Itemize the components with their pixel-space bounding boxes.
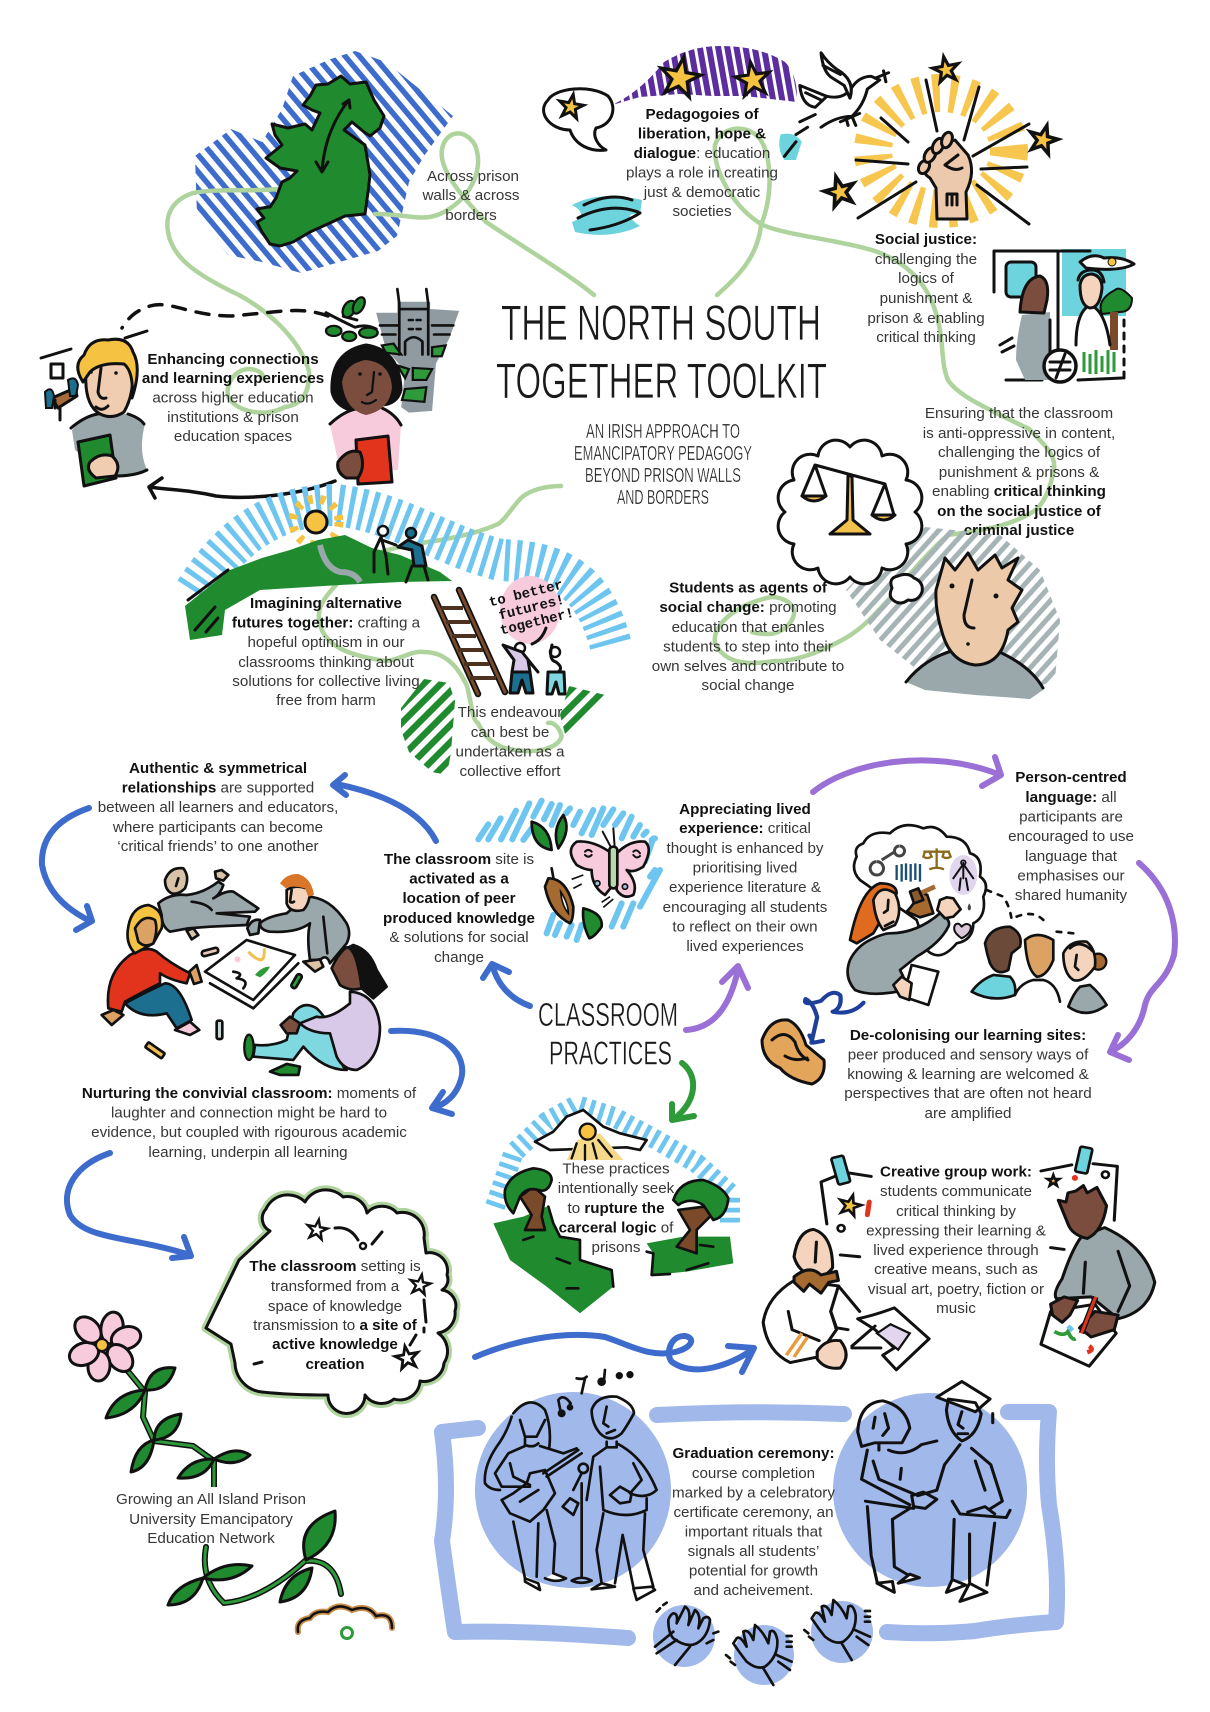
text	[558, 1160, 675, 1256]
speech bubble: to better futures together	[488, 576, 576, 644]
text: change	[434, 949, 484, 966]
text: Pedagogoies of	[645, 106, 759, 123]
icon: man with green book	[71, 339, 147, 486]
illustration: woman, thought cloud and listeners	[848, 825, 1107, 1013]
speech bubble: to better futures together: to better	[488, 578, 565, 611]
text: produced knowledge	[383, 910, 535, 927]
panel: creative group work	[763, 1146, 1155, 1370]
speech bubble: to better futures together: futures!	[497, 593, 566, 624]
label: walls & across	[421, 187, 520, 204]
panel: classroom practices heading: CLASSROOM	[538, 996, 678, 1033]
text: collective effort: This endeavour	[458, 704, 562, 721]
panel: classroom practices heading: PRACTICES	[549, 1034, 672, 1072]
icon: cloud and sun	[535, 1110, 647, 1160]
label: Across prison	[427, 168, 519, 185]
icon: seed	[342, 1628, 352, 1638]
text	[232, 595, 421, 709]
icon: sprouting plant	[168, 1511, 341, 1605]
text: liberation, hope &	[638, 126, 766, 142]
icon: thought cloud	[854, 825, 986, 955]
panel: ensuring anti-oppressive classroom: is anti-oppressive in content,	[923, 425, 1115, 442]
icon: two hikers	[374, 526, 428, 582]
icon: left person cutting	[763, 1229, 929, 1370]
text: Imagining alternative	[250, 595, 402, 612]
icon: purple hatched arc with stars	[612, 46, 797, 105]
icon: map of Ireland	[257, 76, 384, 246]
panel: appreciating lived experience: lived experiences	[686, 938, 804, 955]
text: education spaces	[174, 428, 293, 445]
grey hatching	[846, 527, 1060, 690]
text	[249, 1258, 421, 1373]
panel: appreciating lived experience: to reflect on their own	[672, 918, 818, 936]
panel: classroom site with butterfly	[383, 801, 660, 966]
marks beside man	[41, 331, 147, 358]
panel: appreciating lived experience: experience: critical	[679, 820, 811, 837]
icon: clapping hands	[655, 1600, 870, 1685]
text: music	[936, 1300, 976, 1317]
illustration: two artists	[763, 1146, 1155, 1370]
text: Graduation ceremony:	[672, 1445, 835, 1462]
icon: two figures pointing	[503, 643, 565, 694]
arrow: nurturing to classroom setting	[67, 1153, 191, 1258]
arrow: group to nurturing	[391, 1031, 462, 1114]
text: space of knowledge	[268, 1298, 402, 1315]
text: active knowledge	[272, 1336, 398, 1353]
blue hatching around Ireland	[195, 51, 453, 273]
panel: graduation ceremony	[442, 1370, 1057, 1685]
icon: flower with stem	[66, 1310, 250, 1487]
text	[844, 1027, 1092, 1122]
icon: three listeners	[972, 927, 1107, 1013]
icon: green ground right	[647, 1237, 733, 1275]
text: language: all	[1025, 789, 1117, 806]
panel: ensuring anti-oppressive classroom: Ensuring that the classroom	[925, 405, 1113, 422]
subtitle: AN IRISH APPROACH TO	[586, 421, 740, 443]
text: intentionally seek	[558, 1180, 675, 1197]
text: dialogue: education	[634, 145, 770, 162]
icon: green hills	[185, 535, 452, 640]
text: creative means, such as	[874, 1261, 1038, 1278]
panel: authentic relationships: where participants can become	[112, 819, 323, 836]
icon: person lying	[158, 868, 258, 939]
circles behind figures	[475, 1392, 1027, 1685]
text	[1008, 769, 1134, 904]
text: important rituals that	[685, 1524, 823, 1541]
text: emphasises our	[1017, 868, 1125, 884]
icon: small cloud	[890, 574, 922, 603]
label: Education Network	[147, 1530, 275, 1547]
panel: classroom practices heading	[538, 996, 678, 1072]
text: language that	[1025, 848, 1118, 865]
text: creation	[305, 1356, 365, 1373]
green hatching right	[560, 686, 605, 734]
text: shared humanity	[1015, 887, 1128, 904]
panel: ensuring anti-oppressive classroom	[923, 405, 1115, 539]
text: critical thinking by	[896, 1203, 1016, 1220]
panel: social justice door scene	[867, 231, 1134, 382]
icon: ladder	[434, 590, 505, 694]
text: transmission to a site of	[253, 1317, 418, 1334]
text	[626, 106, 778, 220]
icon: sound squiggle	[805, 993, 863, 1043]
text: social change	[702, 677, 794, 694]
text	[652, 580, 844, 694]
text	[383, 851, 535, 966]
icon: woman in lilac	[244, 945, 387, 1075]
text: marked by a celebratory	[672, 1484, 835, 1502]
icon: right tree	[673, 1180, 728, 1253]
icon: guitarist	[485, 1402, 582, 1590]
panel: nurturing the convivial classroom: Nurturing the convivial classroom: moments of	[82, 1085, 417, 1102]
panel: group around board	[102, 868, 387, 1075]
panel: appreciating lived experience: prioritising lived	[693, 860, 797, 876]
frame: pale blue brackets	[442, 1412, 1057, 1638]
text: Enhancing connections	[147, 351, 319, 368]
panel: appreciating lived experience: thought is enhanced by	[666, 840, 824, 857]
text	[866, 1164, 1046, 1317]
label	[116, 1491, 306, 1547]
icon: stars	[821, 54, 1061, 208]
panel: ensuring anti-oppressive classroom: criminal justice	[964, 522, 1074, 539]
icon: door window	[1006, 262, 1036, 297]
subtitle: BEYOND PRISON WALLS	[585, 465, 741, 487]
text: social change: promoting	[659, 599, 837, 616]
text: plays a role in creating	[626, 164, 778, 182]
text: collective effort: collective effort	[459, 763, 561, 780]
text: signals all students’	[688, 1543, 819, 1560]
panel: authentic relationships	[98, 760, 338, 855]
text: free from harm	[276, 692, 376, 709]
text: prisons	[592, 1239, 641, 1256]
speech bubble: to better futures together: together!	[499, 606, 576, 640]
arrow: classroom site to authentic relationships	[333, 775, 436, 841]
panel: authentic relationships: ‘critical friends’ to one another	[117, 838, 319, 855]
text	[142, 351, 324, 445]
subtitle: EMANCIPATORY PEDAGOGY	[574, 443, 752, 465]
icon: dove	[779, 53, 889, 160]
icon: black rays	[856, 80, 1029, 224]
icon: music notes	[558, 1370, 632, 1416]
icon: ear	[762, 1020, 824, 1084]
icon: right person drawing	[1041, 1186, 1155, 1366]
arrow: purple to lived experience	[686, 966, 748, 1030]
icon: left tree	[505, 1168, 552, 1230]
icon: art supplies left	[821, 1155, 871, 1257]
text: Social justice:	[875, 231, 977, 248]
text: activated as a	[409, 870, 509, 888]
dotted thought line	[987, 890, 1073, 933]
text: & solutions for social	[389, 929, 529, 946]
text: The classroom setting is	[249, 1258, 421, 1275]
panel: nurturing the convivial classroom: laughter and connection might be hard to	[111, 1104, 387, 1122]
icon: cyan backdrop	[1062, 249, 1126, 316]
arrow: to classroom site	[483, 964, 530, 1006]
icon: soil line	[298, 1606, 392, 1632]
right ground edge	[647, 1245, 713, 1275]
icon: woman in red	[102, 905, 202, 1035]
panel: ensuring anti-oppressive classroom: challenging the logics of	[938, 444, 1101, 461]
subtitle: AND BORDERS	[617, 487, 709, 509]
text: across higher education	[152, 390, 314, 406]
subtitle	[574, 421, 752, 509]
panel: appreciating lived experience: encouraging all students	[663, 899, 828, 916]
text: knowing & learning are welcomed &	[847, 1066, 1089, 1083]
panel: pedagogies of liberation	[544, 46, 889, 235]
text: students to step into their	[663, 638, 833, 656]
title: THE NORTH SOUTH	[501, 295, 821, 351]
icon: head and shoulders	[906, 553, 1043, 699]
panel: growing an all island network	[66, 1310, 392, 1638]
text: and learning experiences	[142, 370, 324, 387]
text: collective effort: can best be	[471, 724, 549, 741]
icon: person behind door	[1000, 276, 1050, 380]
panel: nurturing the convivial classroom	[82, 1085, 417, 1161]
text: and acheivement.	[694, 1582, 813, 1599]
panel: ensuring anti-oppressive classroom: on the social justice of	[937, 503, 1102, 520]
icon: fist	[916, 131, 972, 219]
icon: handshake and graduate	[858, 1381, 1010, 1601]
text: encouraged to use	[1008, 828, 1134, 845]
flowing green line: Ireland to enhancing connections	[167, 133, 594, 413]
icon: woman with red book	[330, 345, 401, 484]
text: carceral logic of	[559, 1220, 674, 1237]
text: expressing their learning &	[866, 1223, 1046, 1240]
panel: authentic relationships: relationships are supported	[122, 780, 314, 796]
outline with green halo	[206, 1190, 456, 1414]
icon: sun	[293, 499, 339, 545]
panel: students as agents of change	[652, 440, 1060, 699]
text: logics of	[898, 270, 955, 287]
icon: room with desk	[45, 364, 78, 420]
icon: stars and path	[254, 1218, 432, 1370]
text: futures together: crafting a	[232, 614, 421, 632]
panel: appreciating lived experience: experience literature &	[669, 879, 821, 896]
icon: not-equal sign	[1044, 350, 1076, 382]
light blue hatched arch	[195, 505, 612, 650]
icon: green ground left	[493, 1207, 613, 1313]
flowing green line: Pedagogies, social justice to students	[715, 129, 1054, 663]
panel: nurturing the convivial classroom: evidence, but coupled with rigourous academic	[91, 1124, 407, 1141]
icon: door frame	[994, 251, 1122, 380]
panel: authentic relationships: between all learners and educators,	[98, 799, 338, 816]
label: Growing an All Island Prison	[116, 1491, 306, 1508]
arrow: dashed path between people	[122, 305, 328, 328]
text: solutions for collective living	[232, 673, 420, 690]
text: challenging the	[875, 251, 977, 268]
panel: nurturing the convivial classroom: learning, underpin all learning	[148, 1144, 348, 1161]
label: University Emancipatory	[129, 1511, 293, 1528]
text: lived experience through	[873, 1242, 1039, 1259]
text: transformed from a	[271, 1278, 400, 1295]
icon: cyan waves	[572, 196, 642, 235]
text: institutions & prison	[167, 409, 299, 426]
text: societies	[672, 203, 732, 220]
arrow: purple to de-colonising	[1110, 863, 1175, 1060]
text: own selves and contribute to	[652, 658, 844, 675]
text: to rupture the	[567, 1200, 665, 1217]
text: location of peer	[402, 890, 516, 907]
icon: person with tree	[1076, 256, 1134, 378]
panel: appreciating lived experience: Appreciating lived	[679, 801, 811, 818]
label: borders	[445, 207, 497, 224]
text: participants are	[1019, 808, 1123, 826]
icon: castle and tree	[326, 289, 459, 413]
text: prison & enabling	[867, 310, 985, 327]
text: collective effort	[456, 704, 565, 780]
text: are amplified	[925, 1105, 1011, 1122]
panel: appreciating lived experience	[663, 801, 828, 955]
panel: across prison walls & borders	[257, 76, 520, 246]
arrow: green to rupture practices	[672, 1063, 694, 1120]
text: These practices	[562, 1160, 670, 1178]
icon: woman shaking hands	[858, 1401, 937, 1592]
panel: person-centred language	[848, 769, 1134, 1013]
text: education that enanles	[672, 619, 825, 636]
title: TOGETHER TOOLKIT	[496, 353, 827, 409]
panel: rupture the carceral logic	[493, 1105, 733, 1313]
icon: speech bubble with star	[544, 89, 613, 150]
ground edge	[523, 1207, 613, 1288]
icon: crayons	[145, 947, 303, 1059]
text: potential for growth	[689, 1563, 818, 1580]
panel: social justice raised fist	[821, 54, 1061, 224]
illustration: cloud, ground and trees	[493, 1105, 733, 1313]
panel: ensuring anti-oppressive classroom: punishment & prisons &	[939, 464, 1099, 481]
soil line outline	[298, 1606, 392, 1632]
flowing green line: subtitle to collective effort	[319, 486, 561, 751]
title	[496, 295, 827, 409]
text: punishment &	[880, 290, 972, 307]
icon: art supplies right	[1041, 1146, 1117, 1249]
text	[672, 1445, 835, 1599]
text: Creative group work:	[880, 1164, 1032, 1180]
arrow: black curve	[149, 478, 335, 498]
panel: classroom setting thought bubble	[206, 1190, 456, 1414]
text: visual art, poetry, fiction or	[868, 1281, 1044, 1298]
panel: de-colonising our learning sites	[762, 993, 1092, 1122]
green hatching	[401, 679, 455, 775]
text: classrooms thinking about	[238, 654, 415, 671]
text: hopeful optimism in our	[247, 634, 405, 651]
text: course completion	[692, 1465, 815, 1482]
text: De-colonising our learning sites:	[850, 1027, 1086, 1044]
panel: ensuring anti-oppressive classroom: enabling critical thinking	[932, 483, 1106, 500]
arrow: purple to person-centred	[813, 757, 1001, 792]
icon: musicians	[485, 1370, 657, 1600]
text: students communicate	[880, 1183, 1032, 1200]
text: Person-centred	[1015, 769, 1127, 786]
text: critical thinking	[876, 329, 976, 346]
icon: drawing board	[205, 940, 298, 1008]
label	[421, 168, 520, 224]
icon: woman speaking	[848, 883, 961, 1005]
text: just & democratic	[643, 184, 761, 201]
text: The classroom site is	[384, 851, 535, 868]
icon: butterfly, leaves and hatching	[478, 801, 660, 940]
text: peer produced and sensory ways of	[848, 1046, 1089, 1064]
icon: thought cloud with scales	[778, 440, 922, 584]
icon: graduate with cap and scroll	[912, 1381, 1010, 1601]
text: perspectives that are often not heard	[844, 1085, 1092, 1102]
text	[867, 231, 985, 346]
light blue hatched arch	[495, 1105, 730, 1223]
arrow: authentic to group	[42, 808, 92, 930]
icon: singer with microphone	[563, 1396, 657, 1600]
icon: red-haired person	[247, 874, 349, 972]
text: Students as agents of	[669, 580, 828, 596]
panel: enhancing connections	[41, 289, 459, 498]
arrow: wavy blue to creative group work	[475, 1335, 754, 1372]
icon: yellow rays	[873, 93, 1009, 209]
text: collective effort: undertaken as a	[456, 744, 565, 760]
panel: authentic relationships: Authentic & symmetrical	[129, 760, 307, 777]
text: certificate ceremony, an	[673, 1504, 834, 1521]
panel: imagining alternative futures	[185, 499, 612, 780]
